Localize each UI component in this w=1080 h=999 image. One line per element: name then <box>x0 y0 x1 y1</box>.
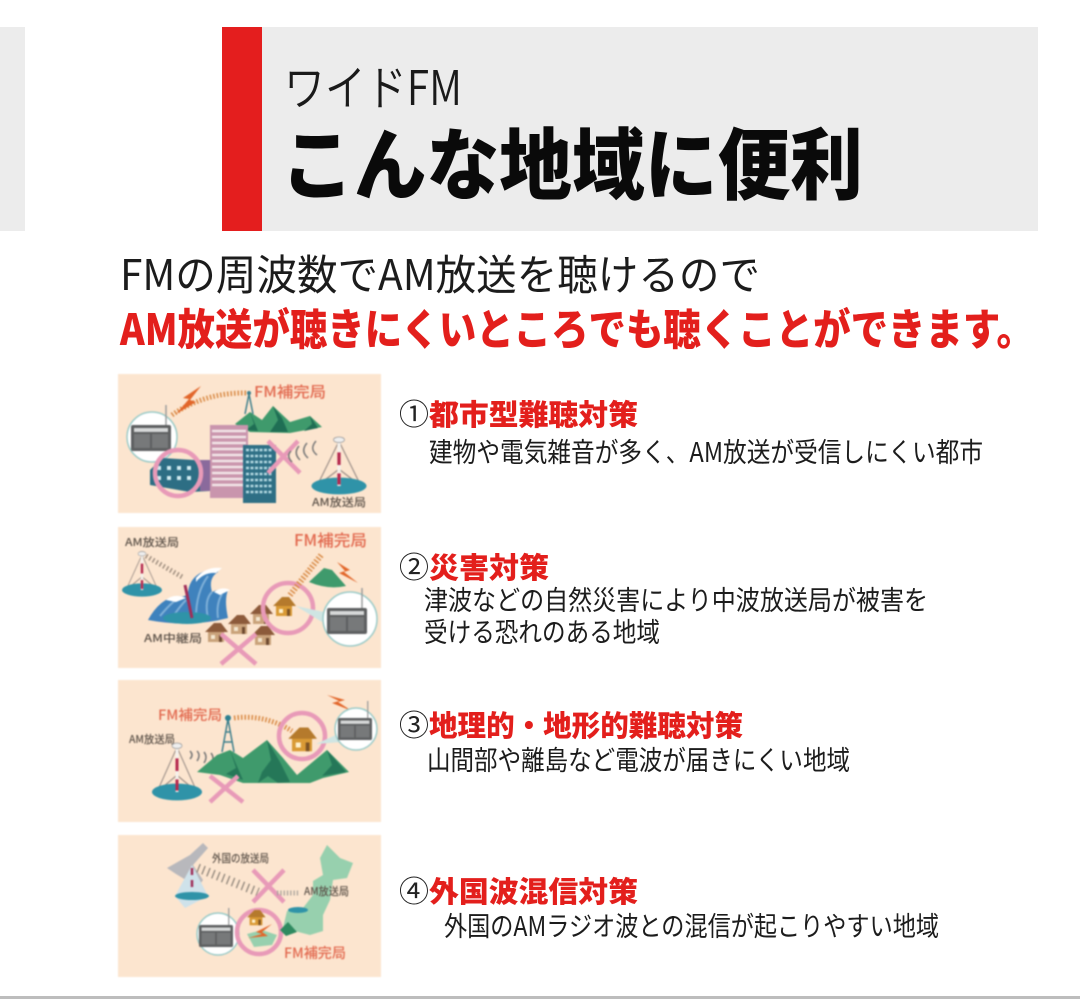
pink cross <box>253 870 284 902</box>
radio bubble <box>296 606 324 622</box>
heading 2: 災害対策 <box>429 545 549 587</box>
mountain <box>309 568 346 587</box>
FM label: FM補完局 <box>284 943 346 963</box>
houses <box>205 623 228 642</box>
heading 1: 都市型難聴対策 <box>429 392 638 434</box>
waves <box>198 868 258 892</box>
mountains <box>235 406 322 433</box>
radio bubble <box>316 734 342 744</box>
title small line: ワイドFM <box>284 49 462 119</box>
relay station <box>163 612 211 624</box>
pink circle <box>155 450 201 496</box>
heading 3: 地理的・地形的難聴対策 <box>429 703 743 745</box>
radio bubble <box>127 412 177 462</box>
Japan map <box>283 845 353 935</box>
description 2: 受ける恐れのある地域 <box>424 611 660 650</box>
title main line: こんな地域に便利 <box>281 104 863 216</box>
lightning <box>327 695 352 711</box>
pink cross <box>221 634 256 664</box>
AM waves <box>289 441 317 462</box>
AM label: AM放送局 <box>129 731 175 747</box>
foreign beam <box>175 865 208 908</box>
title banner <box>222 27 1038 231</box>
heading 4: ④ <box>399 867 429 911</box>
description 2 <box>424 579 928 650</box>
AM label: AM放送局 <box>125 534 179 550</box>
FM label: FM補完局 <box>254 381 326 402</box>
description 3: 山間部や離島など電波が届きにくい地域 <box>427 739 850 778</box>
foreign base <box>175 892 209 900</box>
FM wave <box>290 554 322 595</box>
description 2: 津波などの自然災害により中波放送局が被害を <box>424 579 928 618</box>
AM mast <box>152 743 202 800</box>
lightning <box>248 924 272 938</box>
red accent bar <box>222 27 262 231</box>
FM label: FM補完局 <box>158 705 222 725</box>
AM mast <box>312 437 366 494</box>
relay label: AM中継局 <box>144 630 202 646</box>
teal tower <box>243 445 276 503</box>
panel: disaster illustration <box>118 527 381 668</box>
FM tower <box>222 719 234 752</box>
FM wave arc <box>172 393 248 415</box>
foreign mast <box>191 868 193 896</box>
AM label: AM放送局 <box>304 883 349 899</box>
AM mast <box>122 552 162 597</box>
house <box>288 728 317 751</box>
lightning <box>176 386 201 414</box>
FM label: FM補完局 <box>294 527 367 551</box>
Korea landmass <box>167 843 208 890</box>
AM waves <box>146 556 184 578</box>
radio bubble <box>197 913 239 955</box>
AM waves <box>190 751 213 764</box>
house safe <box>273 597 296 616</box>
pink cross <box>268 441 300 473</box>
panel: urban illustration <box>118 374 381 513</box>
heading 2: ② <box>399 543 429 587</box>
pink circle <box>279 713 325 759</box>
description 1: 建物や電気雑音が多く、AM放送が受信しにくい都市 <box>429 431 983 470</box>
heading 3: ③ <box>399 701 429 745</box>
tsunami wave <box>148 568 228 624</box>
left buildings <box>150 458 210 492</box>
heading 4: 外国波混信対策 <box>429 869 638 911</box>
pink cross <box>210 776 243 802</box>
tall tower <box>210 425 248 498</box>
FM wave <box>234 717 292 731</box>
AM label: AM放送局 <box>312 494 366 510</box>
lightning <box>337 562 358 583</box>
Kyushu <box>247 930 277 947</box>
panel: terrain illustration <box>118 680 381 822</box>
description 4: 外国のAMラジオ波との混信が起こりやすい地域 <box>444 905 939 944</box>
left edge grey band <box>0 27 25 231</box>
FM hill <box>280 922 297 936</box>
mountains <box>197 740 349 783</box>
pink circle <box>263 583 313 633</box>
house <box>247 910 266 925</box>
intro text <box>119 242 1034 358</box>
heading 1: ① <box>399 390 429 434</box>
AM wave <box>277 890 300 896</box>
AM station <box>288 907 308 913</box>
intro line 1: FMの周波数でAM放送を聴けるので <box>120 242 760 303</box>
FM tower <box>245 394 253 414</box>
foreign label: 外国の放送局 <box>212 850 269 866</box>
panel: foreign interference illustration <box>118 835 381 977</box>
pink circle <box>237 910 281 954</box>
